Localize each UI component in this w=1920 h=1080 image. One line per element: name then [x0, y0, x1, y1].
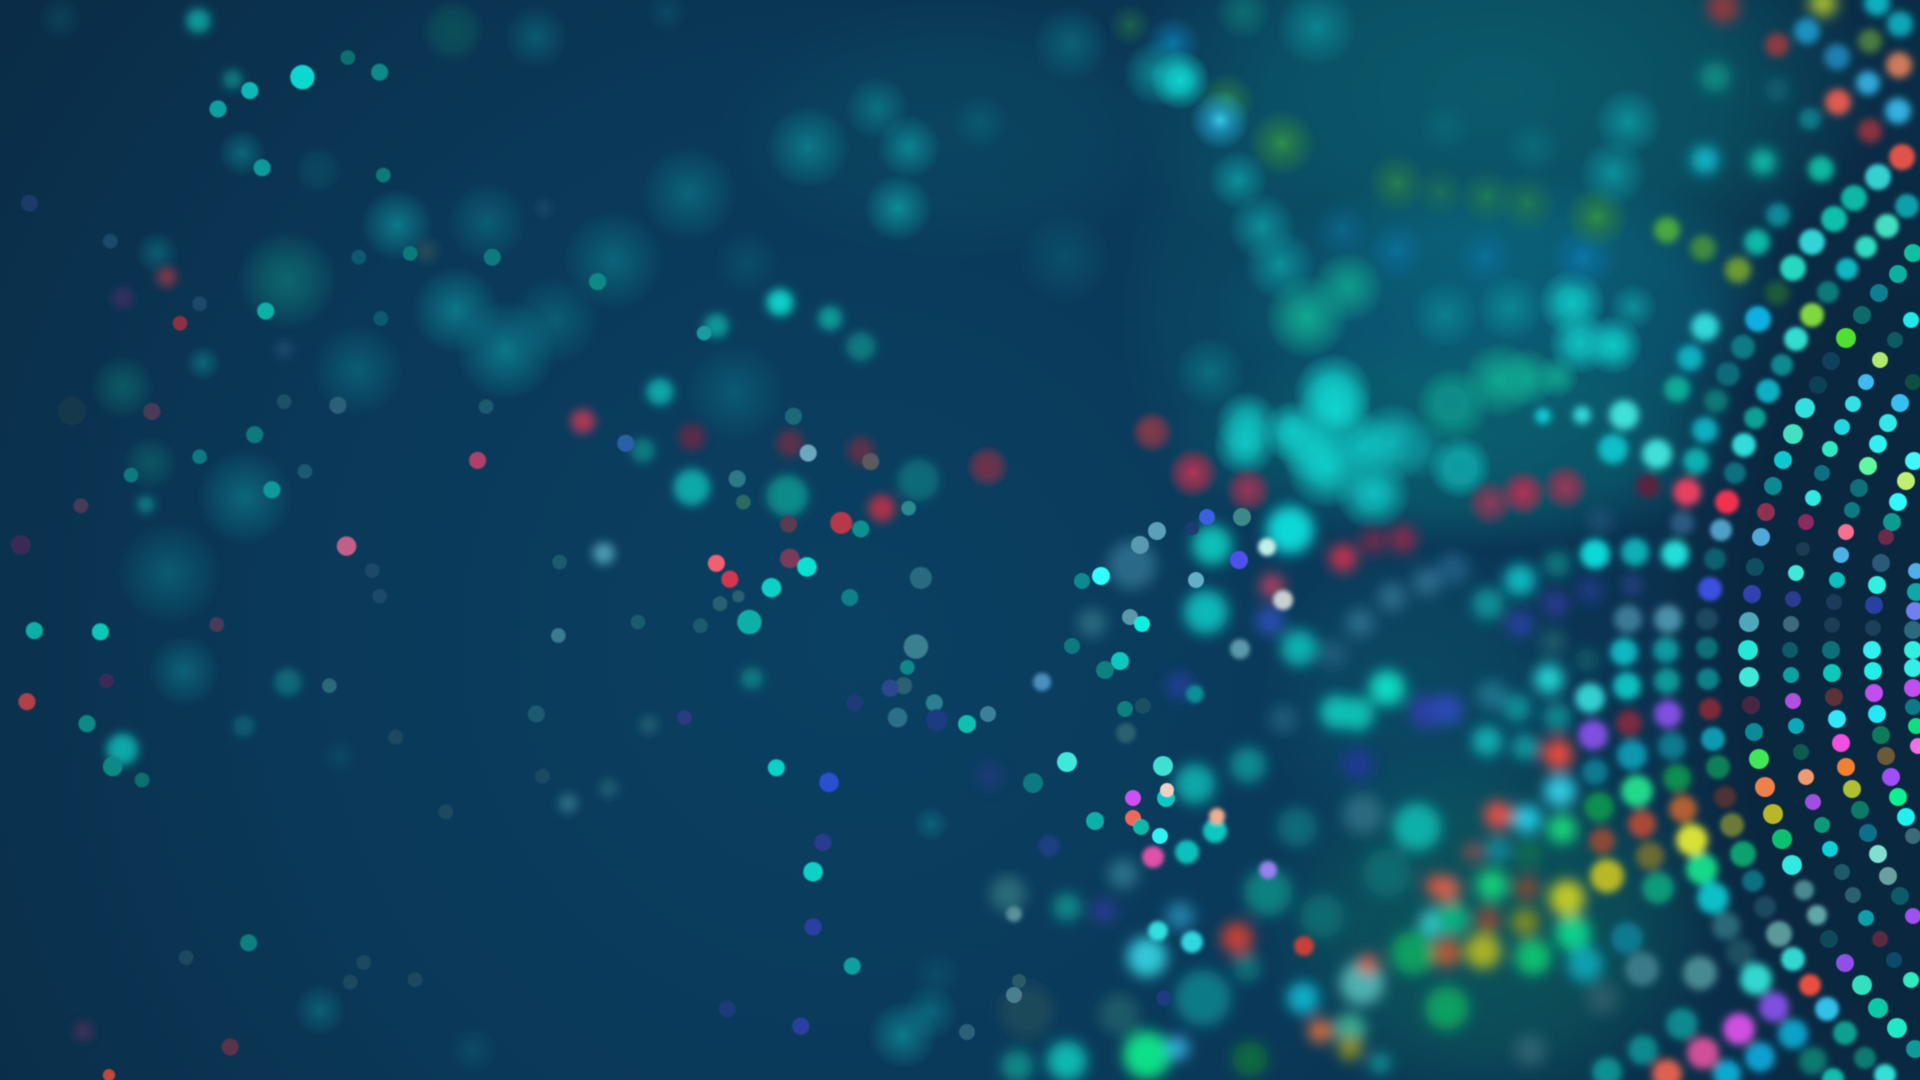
cluster of lightly blurred dots, centre right — [1006, 144, 1919, 1080]
sharp ring dots, far right — [1738, 244, 1920, 1058]
dark right corner behind sharp dots — [1650, 120, 1920, 1080]
large soft bokeh, left field — [38, 0, 1111, 1074]
middle ring dots, soft — [1535, 0, 1913, 1080]
teal haze — [720, 0, 1880, 1080]
sharp small dots, left and middle field — [11, 50, 948, 1080]
mid blur dots, left field — [73, 9, 1164, 1041]
sharp dots, centre — [958, 508, 1251, 1040]
large soft bokeh, upper right cloud — [966, 0, 1662, 531]
lower and centre bokeh — [977, 0, 1837, 1080]
